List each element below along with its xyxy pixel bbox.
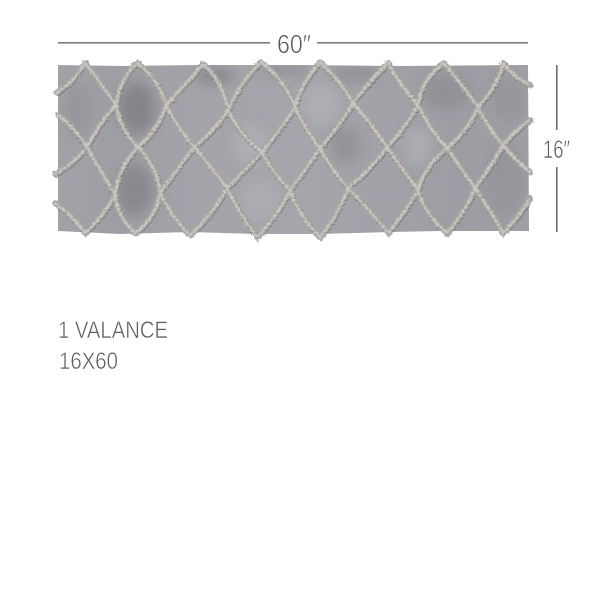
valance fabric panel (55, 62, 531, 238)
label: size: 16X60 (59, 348, 118, 375)
lattice shadow (56, 63, 531, 238)
fabric shading (66, 65, 522, 218)
infographic: valance dimensions (52, 34, 570, 369)
product label (58, 317, 168, 375)
lattice tuft highlights (55, 62, 530, 237)
height dimension: 16 inches: 16″ (543, 136, 570, 164)
chenille diamond lattice (55, 62, 530, 237)
fabric base (58, 65, 529, 234)
label: quantity: 1 VALANCE (58, 317, 168, 344)
lattice tufted base (55, 62, 530, 237)
fabric weave texture (58, 66, 528, 234)
width dimension: 60 inches: 60″ (277, 29, 311, 59)
